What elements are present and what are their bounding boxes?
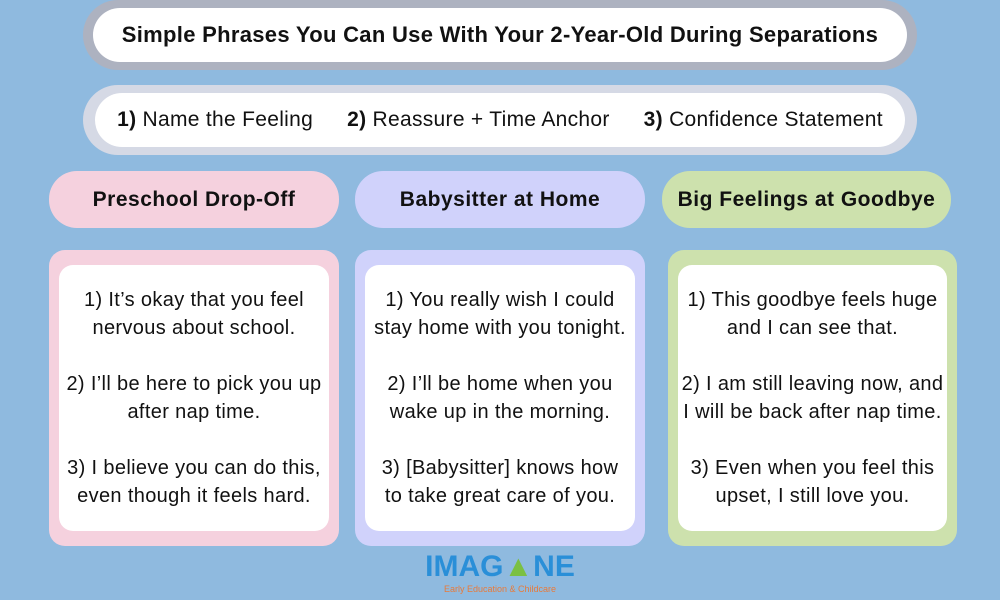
panel: babysitter: wake up in the morning. <box>390 401 610 423</box>
panel: big feelings: upset, I still love you. <box>715 485 910 507</box>
header: Babysitter at Home <box>355 171 645 228</box>
panel: babysitter: to take great care of you. <box>385 485 615 507</box>
panel: preschool: 2) I’ll be here to pick you up <box>66 373 322 395</box>
steps bar <box>83 85 917 155</box>
title: Simple Phrases You Can Use With Your 2-Year-Old During Separations <box>122 22 878 47</box>
logo: IMAG▲NE <box>425 550 575 583</box>
panel: babysitter: 3) [Babysitter] knows how <box>382 457 618 479</box>
header: Preschool Drop-Off <box>49 171 339 228</box>
panel: big feelings: 3) Even when you feel this <box>691 457 934 479</box>
panel: preschool: 3) I believe you can do this, <box>67 457 321 479</box>
panel: big feelings: I will be back after nap time. <box>683 401 942 423</box>
header: Preschool Drop-Off: Preschool Drop-Off <box>93 188 295 210</box>
panel: preschool: 1) It’s okay that you feel <box>84 289 304 311</box>
header: Babysitter at Home: Babysitter at Home <box>400 188 600 210</box>
panel: preschool: nervous about school. <box>92 317 296 339</box>
panel: big feelings <box>668 250 957 546</box>
panel: babysitter <box>355 250 645 546</box>
panel: babysitter: stay home with you tonight. <box>374 317 626 339</box>
title <box>83 0 917 70</box>
logo: Early Education & Childcare <box>444 584 556 594</box>
steps bar: 1) Name the Feeling <box>117 108 313 131</box>
panel: preschool <box>49 250 339 546</box>
panel: preschool: after nap time. <box>127 401 261 423</box>
header: Big Feelings at Goodbye: Big Feelings at Goodbye <box>678 188 935 210</box>
panel: babysitter: 2) I’ll be home when you <box>387 373 613 395</box>
header: Big Feelings at Goodbye <box>662 171 951 228</box>
steps bar: 3) Confidence Statement <box>644 108 883 131</box>
panel: babysitter: 1) You really wish I could <box>385 289 615 311</box>
steps bar: 2) Reassure + Time Anchor <box>347 108 610 131</box>
panel: preschool: even though it feels hard. <box>77 485 311 507</box>
panel: big feelings: 1) This goodbye feels huge <box>687 289 938 311</box>
panel: big feelings: and I can see that. <box>727 317 898 339</box>
panel: big feelings: 2) I am still leaving now, and <box>682 373 943 395</box>
